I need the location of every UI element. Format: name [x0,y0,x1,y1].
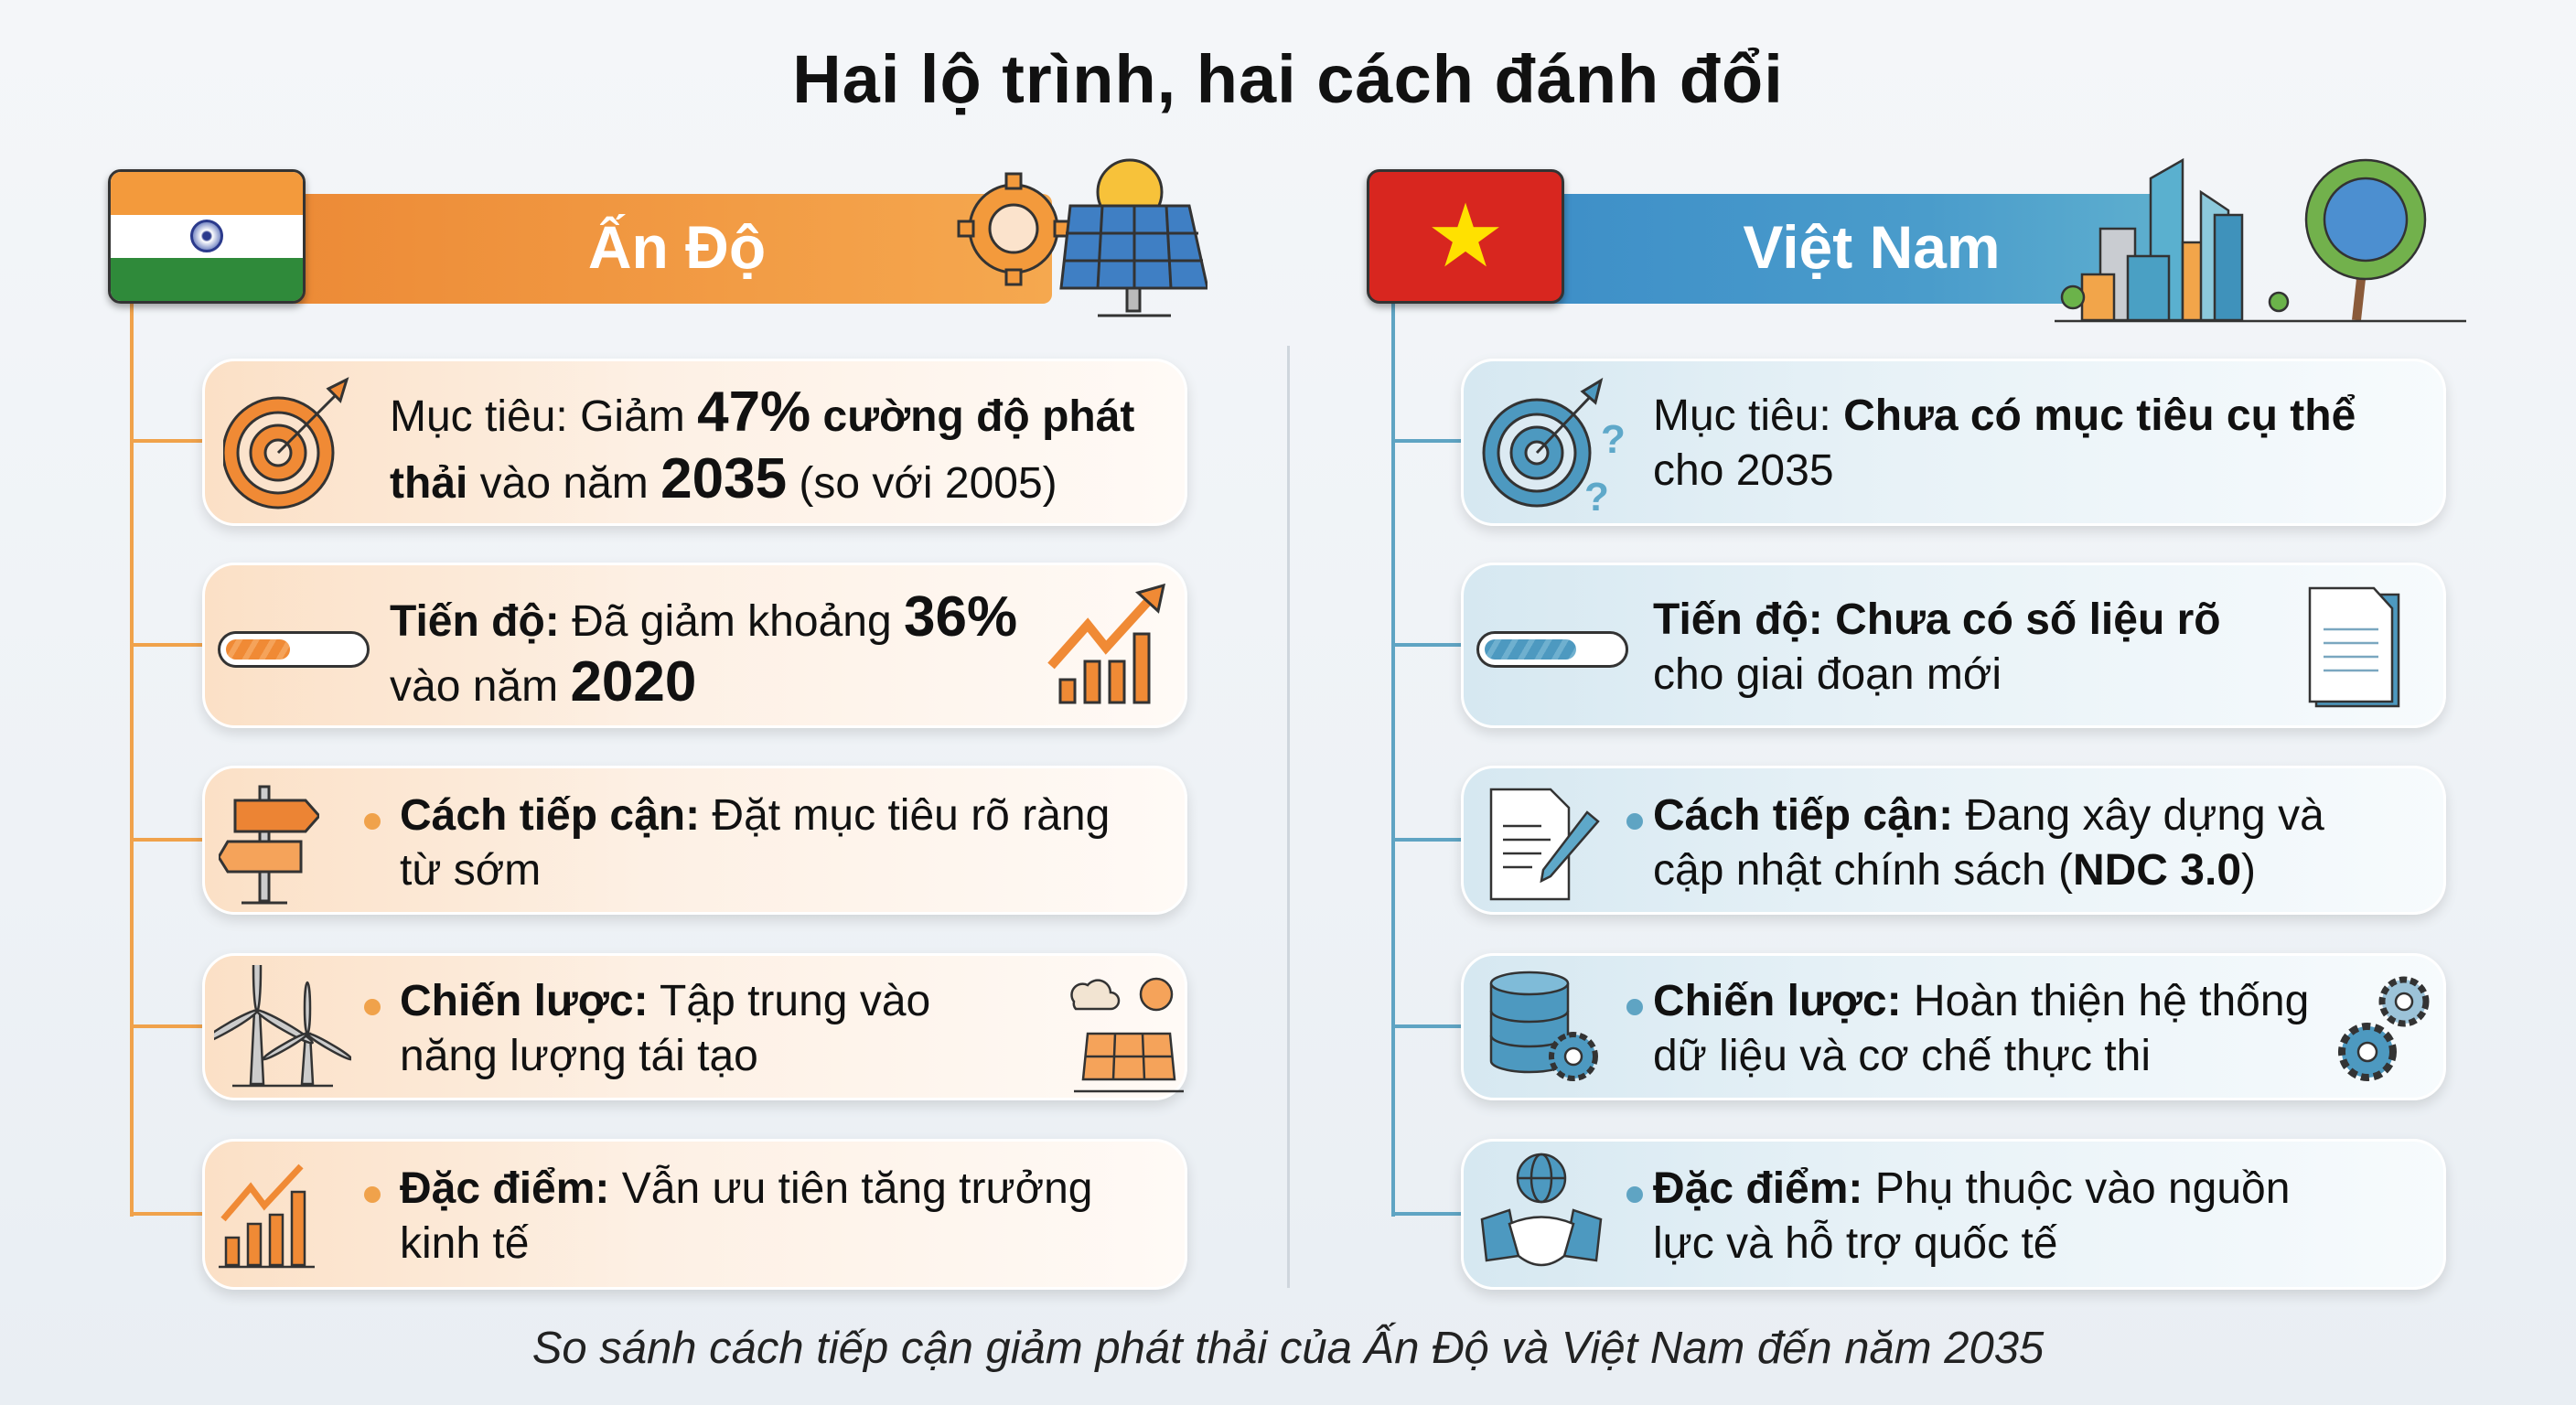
text: target VN: Mục tiêu: Chưa có mục tiêu cụ thể [1653,391,2356,440]
icon: target with question marks: ? [1584,475,1609,520]
text: target VN [1653,391,2356,495]
text: approach: từ sớm [400,846,541,895]
connectors [134,439,202,1216]
text: strategy: năng lượng tái tạo [400,1032,758,1080]
icon: growth chart [1047,584,1165,704]
icon: city and globe tree [2055,157,2466,322]
bullet [1626,999,1643,1015]
text: target [390,381,1134,510]
card: Đặc điểm VN [1461,1139,2446,1290]
icon: target [223,377,349,509]
icon: gears [2338,977,2430,1081]
card: Chiến lược VN [1461,953,2446,1100]
text: approach VN: cập nhật chính sách (NDC 3.0) [1653,846,2256,895]
bullet [1626,1186,1643,1203]
divider line [1287,346,1290,1288]
icon: Vietnam flag: ★ [1426,187,1505,285]
text: characteristic VN [1653,1164,2290,1268]
icon: sun cloud solar [1070,977,1184,1092]
card: Mục tiêu [202,359,1187,526]
icon: signpost [219,785,319,904]
text: progress VN: cho giai đoạn mới [1653,650,2002,699]
card: Cách tiếp cận [202,766,1187,915]
icon: document [2309,587,2400,708]
timeline line [1391,302,1395,1217]
text: strategy VN: Chiến lược: Hoàn thiện hệ thống [1653,977,2309,1025]
timeline line [130,302,134,1217]
text: characteristic VN: Đặc điểm: Phụ thuộc vào nguồn [1653,1164,2290,1213]
heading: Việt Nam: Việt Nam [1743,213,2001,281]
text: characteristic: kinh tế [400,1219,529,1268]
icon: document with pen [1489,788,1600,900]
bullet [1626,813,1643,830]
text: approach [400,791,1110,895]
card: Chiến lược [202,953,1187,1100]
text: target: Mục tiêu: Giảm 47% cường độ phát [390,381,1134,444]
panel: India [103,159,1208,1299]
header bar: Vietnam [1542,194,2183,304]
icon: wind turbines [214,965,351,1087]
text: characteristic [400,1164,1092,1268]
bullet [364,999,381,1015]
text: progress VN: Tiến độ: Chưa có số liệu rõ [1653,595,2221,644]
header bar: India [274,194,1052,304]
icon: gear and solar panel [957,159,1208,316]
text: strategy: Chiến lược: Tập trung vào [400,977,930,1025]
bullet [364,1186,381,1203]
text: characteristic VN: lực và hỗ trợ quốc tế [1653,1219,2057,1268]
icon: globe handshake [1480,1153,1603,1266]
icon: Vietnam flag [1367,169,1564,304]
heading: Ấn Độ: Ấn Độ [588,213,766,281]
text: progress [390,585,1017,713]
text: target VN: cho 2035 [1653,446,1834,495]
text: approach: Cách tiếp cận: Đặt mục tiêu rõ ràng [400,791,1110,840]
text: strategy VN: dữ liệu và cơ chế thực thi [1653,1032,2151,1080]
text: strategy [400,977,930,1080]
caption: So sánh cách tiếp cận giảm phát thải của Ấn Độ và Việt Nam đến năm 2035 [532,1324,2044,1373]
text: approach VN: Cách tiếp cận: Đang xây dựng và [1653,791,2324,840]
title: Hai lộ trình, hai cách đánh đổi [792,41,1784,117]
panel: Vietnam [1362,157,2466,1299]
icon: growth chart [219,1164,315,1268]
icon: target with question marks: ? [1601,417,1626,462]
text: approach VN [1653,791,2324,895]
icon: target with question marks [1482,377,1626,520]
card: Mục tiêu VN [1461,359,2446,526]
icon: progress bar [1476,631,1628,668]
text: progress VN [1653,595,2221,699]
card: Tiến độ [202,563,1187,728]
text: progress: Tiến độ: Đã giảm khoảng 36% [390,585,1017,649]
icon: progress bar [218,631,370,668]
text: strategy VN [1653,977,2309,1080]
connectors [1395,439,1461,1216]
card: Tiến độ VN [1461,563,2446,728]
card: Cách tiếp cận VN [1461,766,2446,915]
card: Đặc điểm [202,1139,1187,1290]
text: progress: vào năm 2020 [390,650,696,713]
text: target: thải vào năm 2035 (so với 2005) [390,447,1057,510]
text: characteristic: Đặc điểm: Vẫn ưu tiên tăng trưởng [400,1164,1092,1213]
icon: India flag [108,169,306,304]
bullet [364,813,381,830]
icon: database gear [1489,971,1598,1081]
